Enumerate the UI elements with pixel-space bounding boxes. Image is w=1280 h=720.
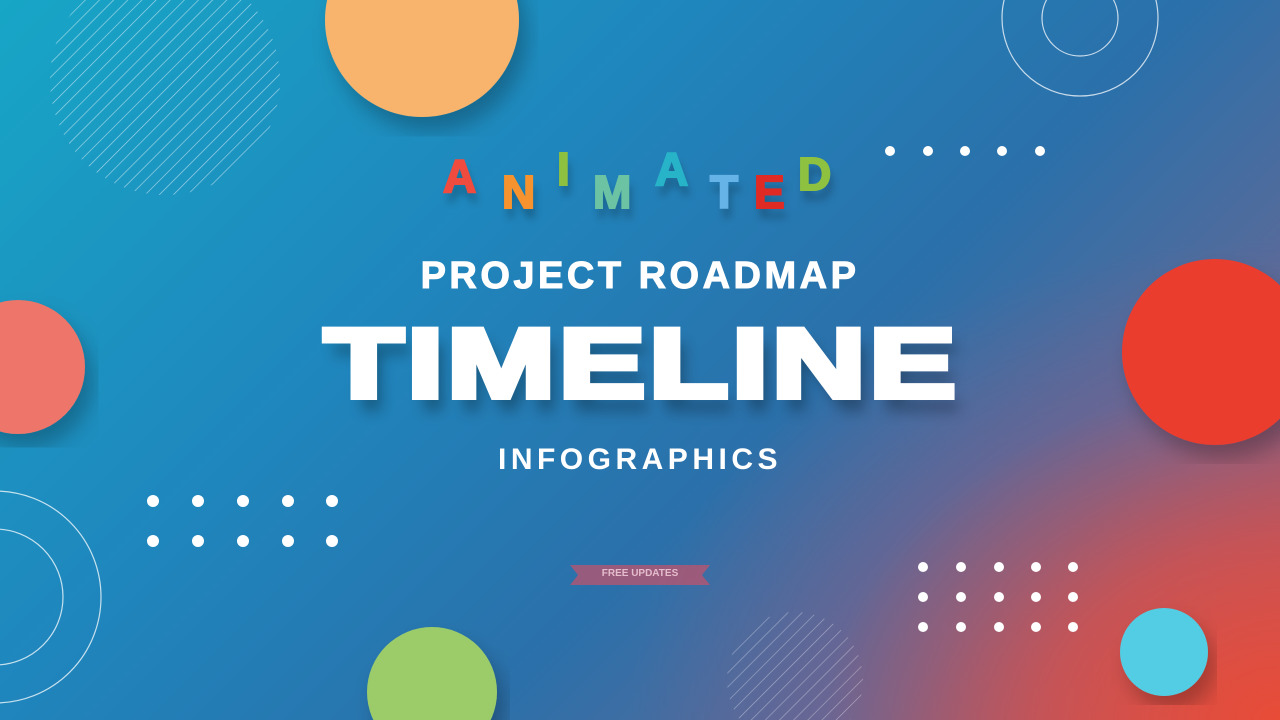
subtitle: infographics: INFOGRAPHICS	[498, 443, 782, 476]
circle pink left	[0, 300, 85, 434]
animated letters: D	[798, 148, 831, 200]
circle cyan	[1120, 608, 1208, 696]
circle red right	[1122, 259, 1280, 445]
outline circles top-right	[1002, 0, 1158, 96]
hatched circle bottom	[727, 612, 863, 720]
animated letters: T	[710, 166, 738, 218]
ribbon: free updates: FREE UPDATES	[602, 568, 678, 579]
hatched circle top-left	[50, 0, 280, 195]
ribbon: free updates	[570, 565, 710, 585]
dots left grid	[147, 495, 338, 547]
animated letters: N	[502, 166, 535, 218]
subtitle: project roadmap: PROJECT ROADMAP	[421, 255, 859, 297]
circle green	[367, 627, 497, 720]
animated letters: A	[443, 150, 476, 202]
circle orange	[325, 0, 519, 117]
outline circles bottom-left	[0, 491, 101, 703]
dots top-right	[885, 146, 1045, 156]
dots bottom-right grid	[918, 562, 1078, 632]
title: timeline: TIMELINE	[324, 308, 960, 418]
animated letters	[442, 143, 836, 222]
animated letters: A	[655, 143, 688, 195]
animated letters: I	[557, 143, 570, 195]
animated letters: E	[754, 166, 785, 218]
animated letters: M	[593, 166, 631, 218]
